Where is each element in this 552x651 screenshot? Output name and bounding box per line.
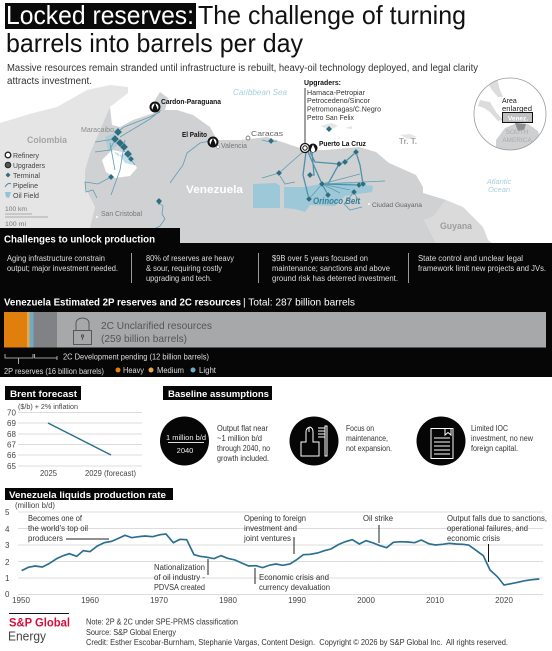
assumption: maintenance: not expansion. (346, 444, 392, 453)
footer notes (86, 618, 508, 647)
chart: Brent forecast: 65 (7, 462, 16, 471)
land: Lake Maracaibo (102, 150, 137, 178)
pipelines west (85, 110, 277, 232)
assumption: maintenance: Focus on (346, 424, 374, 433)
map labels: Puerto La Cruz (319, 141, 366, 148)
terminals (108, 126, 366, 205)
annotation: top producers: the world's top oil (28, 524, 88, 533)
upgraders callout: Petro San Felix (307, 113, 354, 122)
assumption: maintenance: maintenance, (346, 434, 388, 443)
map labels: Tr. T. (399, 136, 417, 146)
bracket labels (4, 352, 209, 376)
subtitle: Massive resources remain stranded until infrastructure is rebuilt, heavy-oil technology deployed, and legal clarity (7, 63, 478, 74)
assumption: limited investment (416, 416, 533, 466)
map labels: Caribbean Sea (233, 88, 288, 97)
chart: production rate: 4 (5, 525, 10, 534)
stacked bar (4, 312, 546, 348)
challenge 1 (7, 254, 118, 273)
chart: production rate: (million b/d) (15, 501, 55, 510)
challenge 2: 80% of reserves are heavy (146, 254, 234, 263)
map of Venezuela (0, 78, 546, 243)
map legend: Oil Field (13, 193, 39, 200)
locator globe (474, 78, 546, 150)
refinery and upgrader icons (150, 102, 318, 152)
challenge 2 (146, 254, 234, 283)
assumption: output: through 2040, no (217, 444, 270, 453)
reserves legend: Light (199, 366, 217, 375)
map labels: Cardon-Paraguana (161, 99, 221, 106)
annotation: nationalization: PDVSA created (154, 583, 205, 592)
map labels: Valencia (221, 143, 247, 150)
land: islands (320, 123, 417, 139)
footer notes: Note: 2P & 2C under SPE-PRMS classification (86, 618, 238, 626)
map labels: Guyana (440, 221, 473, 231)
logo: Energy (8, 628, 46, 644)
annotation: output falls (447, 514, 547, 562)
annotation: opening to foreign investment: Opening to foreign (244, 514, 306, 523)
footer notes: Source: S&P Global Energy (86, 628, 176, 637)
assumption: output: Output flat near (217, 424, 268, 433)
map labels (27, 88, 512, 231)
locator globe: enlarged (502, 106, 532, 113)
heading: reserves: | Total: 287 billion barrels (243, 296, 355, 308)
subtitle (7, 63, 478, 87)
challenge 4 (418, 254, 546, 273)
challenge 3 (272, 254, 398, 283)
assumption: limited investment: Limited IOC (471, 424, 508, 433)
chart: production rate: 1950 (12, 596, 30, 605)
heading: challenges: Challenges to unlock production (4, 234, 155, 246)
reserves legend: Medium (157, 366, 184, 375)
upgraders callout: Petromonagas/C.Negro (307, 104, 381, 114)
challenge 3: $9B over 5 years focused on (272, 254, 368, 263)
map labels: Orinoco Belt (313, 196, 361, 207)
production line (22, 534, 539, 585)
land: Colombia (0, 85, 128, 243)
footer notes: Credit: Esther Escobar-Burnham, Stephanie Vargas, Content Design. Copyright © 2026 by S&P Global Inc. All rights reserved. (86, 638, 508, 647)
chart: production rate: 1970 (150, 596, 168, 605)
panel: challenges and reserves (0, 228, 552, 377)
map legend: Refinery (13, 153, 39, 160)
upgraders callout: Hamaca-Petropiar (307, 88, 365, 97)
heading: baseline assumptions: Baseline assumptions (168, 389, 269, 400)
map labels: Ocean (488, 185, 510, 194)
assumption: limited investment: investment, no new (471, 434, 533, 443)
oil fields (105, 133, 373, 212)
annotation: output falls: operational failures, and (447, 524, 528, 533)
pipelines east (303, 152, 363, 199)
panel: baseline assumptions (160, 386, 533, 466)
annotation: economic crisis (255, 568, 330, 592)
chart: production rate: 2010 (426, 596, 444, 605)
chart: production rate: 0 (5, 590, 10, 599)
heading: challenges (0, 228, 180, 246)
map legend: Upgraders (13, 163, 45, 170)
locator globe: SOUTH (506, 129, 529, 136)
annotation: oil strike: Oil strike (363, 514, 394, 523)
map legend: 100 km (5, 206, 27, 213)
challenge 2: upgrading and tech. (146, 274, 212, 283)
chart: production rate (5, 488, 547, 605)
challenge 2: & sour, requiring costly (146, 264, 222, 273)
annotation: nationalization: Nationalization (154, 563, 205, 572)
title: Locked reserves: (6, 0, 194, 30)
annotation: oil strike (363, 514, 394, 543)
logo: S&P Global (9, 618, 70, 630)
chart: Brent forecast: 68 (7, 430, 16, 439)
annotation: opening to foreign investment (243, 514, 306, 554)
chart: production rate: 1960 (81, 596, 99, 605)
annotation: top producers (28, 514, 109, 543)
assumption: output: 2040 (177, 446, 193, 455)
chart: production rate: 3 (5, 541, 10, 550)
chart: production rate: 1 (5, 574, 10, 583)
challenge 3: maintenance; sanctions and above (272, 264, 391, 273)
challenge 1: Aging infrastructure constrain (7, 254, 105, 263)
upgraders callout (304, 78, 381, 143)
assumption: maintenance (290, 416, 392, 466)
map labels: Ciudad Guayana (372, 202, 422, 209)
land: Venezuela (85, 92, 446, 243)
assumption: output: 1 million b/d (166, 433, 206, 442)
icon: padlock (74, 318, 92, 344)
chart: production rate: 5 (5, 508, 10, 517)
map legend (5, 152, 48, 228)
locator globe: Venez. (508, 116, 528, 122)
bracket labels: 2P reserves (16 billion barrels) (4, 367, 104, 376)
chart: Brent forecast: 70 (7, 408, 16, 418)
heading: production rate: Venezuela liquids production rate (9, 490, 166, 501)
annotation: output falls: economic crisis (447, 534, 500, 543)
annotation: opening to foreign investment: investment and (244, 524, 297, 533)
map labels: Maracaibo (81, 127, 114, 134)
map labels: Venezuela (186, 184, 244, 196)
stacked bar: (259 billion barrels) (101, 333, 187, 345)
subtitle: attracts investment. (7, 76, 92, 87)
chart: production rate: 1990 (288, 596, 306, 605)
upgraders callout: Petrocedeno/Sincor (307, 96, 370, 105)
annotation: top producers: producers (28, 534, 63, 543)
heading: reserves: Venezuela Estimated 2P reserves and 2C resources (4, 296, 241, 308)
challenge 4: framework limit new projects and JVs. (418, 264, 546, 273)
chart: production rate: 2020 (495, 596, 513, 605)
chart: Brent forecast (5, 386, 142, 478)
assumption: limited investment: foreign capital. (471, 444, 518, 453)
map legend: Terminal (13, 173, 40, 180)
map labels: Caracas (251, 129, 283, 138)
annotation: opening to foreign investment: joint ventures (243, 534, 291, 543)
assumption: output: growth included. (217, 454, 269, 463)
map labels: El Palito (182, 132, 207, 139)
title: barrels into barrels per day (6, 28, 303, 58)
chart: Brent forecast: 2025 (40, 469, 58, 478)
locator globe: AMERICA (502, 137, 532, 144)
chart: Brent forecast: 2029 (forecast) (85, 469, 136, 478)
chart: Brent forecast: 69 (7, 419, 16, 428)
annotation: nationalization (154, 559, 208, 592)
map legend: Pipeline (13, 183, 38, 190)
title (5, 0, 466, 58)
bracket labels: 2C Development pending (12 billion barrels) (63, 352, 209, 362)
icon: dustpan and brush (301, 426, 327, 456)
chart: Brent forecast: 66 (7, 451, 16, 460)
challenge 3: ground risk has deterred investment. (272, 274, 398, 283)
chart: production rate: 2000 (357, 596, 375, 605)
chart: production rate: 1980 (219, 596, 237, 605)
annotation: top producers: Becomes one of (28, 514, 83, 523)
assumption: output: ~1 million b/d (217, 434, 262, 443)
heading: Brent forecast: Brent forecast (10, 389, 78, 400)
assumption: output (160, 416, 270, 466)
annotation: economic crisis: currency devaluation (259, 583, 330, 592)
challenge 4: State control and unclear legal (418, 254, 523, 263)
title: The challenge of turning (198, 0, 466, 30)
logo (8, 614, 70, 644)
map labels: Atlantic (486, 177, 512, 186)
challenge 1: output; major investment needed. (7, 264, 118, 273)
annotation: output falls: Output falls due to sanctions, (447, 514, 547, 523)
stacked bar: 2C Unclarified resources (101, 320, 212, 332)
chart: production rate: 2 (5, 558, 10, 567)
map legend: 100 mi (5, 221, 26, 228)
map labels: Colombia (27, 135, 68, 145)
annotation: nationalization: of oil industry - (154, 573, 205, 582)
annotation: economic crisis: Economic crisis and (259, 573, 329, 582)
chart: Brent forecast: ($/b) + 2% inflation (18, 402, 78, 411)
locator globe: Area (502, 98, 517, 105)
land: Guyana (424, 200, 492, 243)
chart: Brent forecast: 67 (7, 440, 16, 450)
reserves legend: Heavy (123, 366, 144, 375)
reserves legend (116, 366, 217, 375)
upgraders callout: Upgraders: (304, 78, 341, 87)
icon: document (431, 428, 453, 458)
map labels: San Cristobal (101, 211, 142, 218)
